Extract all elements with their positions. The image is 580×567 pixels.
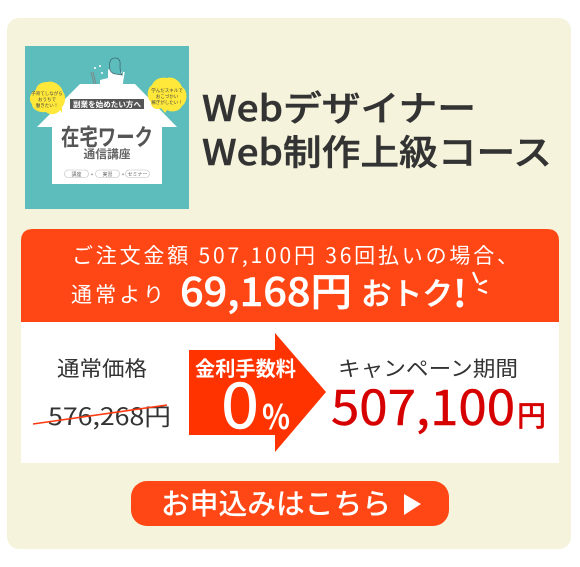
speech bubble: left: 働きたい！ bbox=[36, 102, 58, 109]
speech bubble: left: 子育てしながら bbox=[31, 90, 63, 97]
arrow: interest 0%: 0 bbox=[221, 356, 259, 446]
house illustration bbox=[37, 84, 177, 184]
course thumbnail image bbox=[25, 46, 189, 209]
pills: lecture, practice, seminar: 講座 bbox=[71, 171, 82, 178]
pills: lecture, practice, seminar: + bbox=[91, 171, 94, 178]
button: apply here: お申込みはこちら bbox=[161, 481, 391, 523]
speech bubble: right bbox=[148, 78, 186, 113]
arrow: interest 0%: 金利手数料 bbox=[195, 352, 296, 382]
arrow: interest 0% bbox=[189, 333, 326, 452]
speech bubble: left bbox=[30, 82, 65, 114]
pills: lecture, practice, seminar: + bbox=[122, 171, 125, 178]
pills: lecture, practice, seminar: セミナー bbox=[127, 171, 148, 178]
banner: savings: 69,168円 bbox=[180, 262, 352, 318]
speech bubble: right: 学んだスキルで bbox=[151, 87, 183, 94]
arrow: interest 0%: % bbox=[262, 390, 290, 439]
icon: person at laptop bbox=[91, 58, 124, 84]
icon: play triangle bbox=[404, 494, 421, 515]
pills: lecture, practice, seminar: 実習 bbox=[102, 171, 113, 178]
icon: sparkle lines bbox=[474, 273, 486, 292]
heading: course name bbox=[202, 81, 552, 176]
banner: savings: 通常より bbox=[71, 279, 164, 309]
heading: course name: Webデザイナー bbox=[202, 81, 476, 132]
campaign price: 507,100 bbox=[331, 369, 515, 439]
campaign price: 円 bbox=[517, 393, 546, 435]
regular price struck through: 576,268円 bbox=[48, 397, 171, 432]
speech bubble: left: おうちで bbox=[38, 96, 56, 103]
pills: lecture, practice, seminar bbox=[64, 170, 150, 178]
banner: savings: ご注文金額 507,100円 36回払いの場合、 bbox=[72, 240, 518, 270]
banner: savings: ! bbox=[453, 264, 467, 318]
panel: price comparison white area bbox=[21, 320, 559, 463]
heading: course name: Web制作上級コース bbox=[202, 125, 552, 176]
speech bubble: right: 稼ぎがしたい！ bbox=[151, 99, 183, 106]
banner: savings bbox=[21, 229, 559, 322]
thumbnail title: 在宅ワーク bbox=[61, 118, 153, 152]
banner: savings: おトク bbox=[361, 269, 453, 314]
button: apply here bbox=[131, 481, 449, 526]
thumbnail subtitle: 通信講座 bbox=[84, 146, 131, 162]
label: campaign period: キャンペーン期間 bbox=[338, 353, 518, 383]
speech bubble: right: おこづかい bbox=[156, 93, 179, 100]
label: regular price: 通常価格 bbox=[57, 353, 147, 383]
banner: 副業を始めたい方へ: 副業を始めたい方へ bbox=[73, 99, 142, 110]
